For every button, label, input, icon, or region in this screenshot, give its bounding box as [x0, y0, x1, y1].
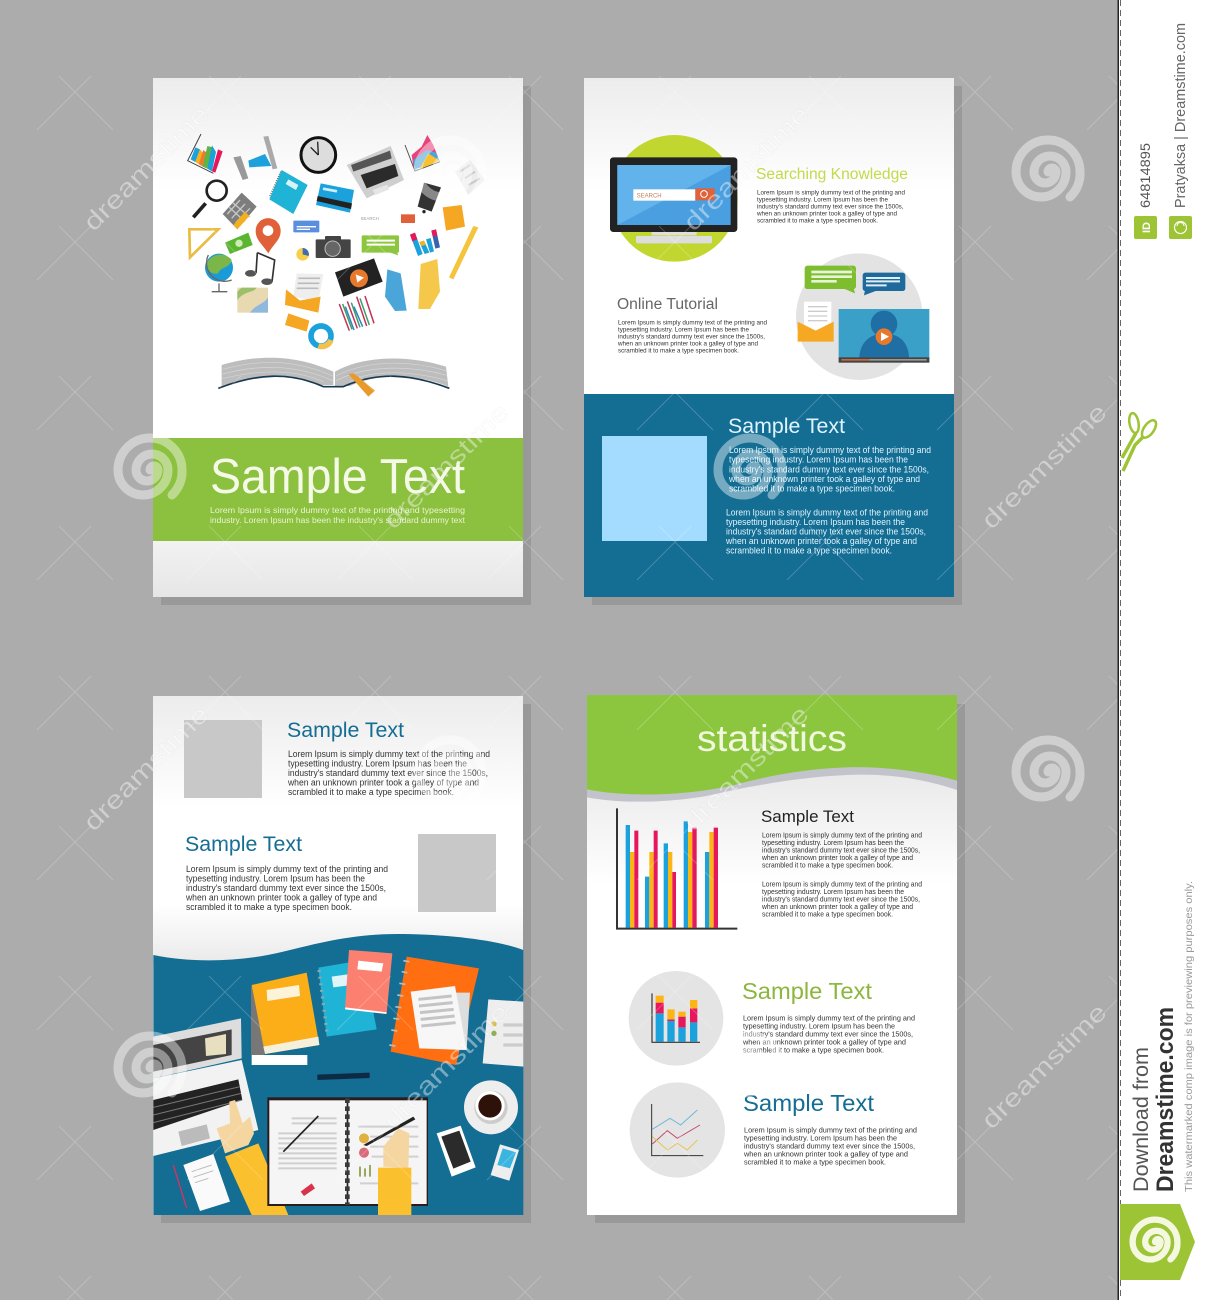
icon: left hand and sleeve: [217, 1100, 288, 1215]
text block: blue section first: [728, 445, 931, 493]
text block: top: Lorem Ipsum is simply dummy text of the printing and: [288, 749, 490, 759]
icon: bar chart: [188, 134, 223, 173]
text block: second: industry's standard dummy text ever since the 1500s,: [762, 896, 920, 904]
text block: top: when an unknown printer took a galley of type and: [287, 778, 479, 788]
icon: envelope with letter: [285, 273, 323, 313]
text block: second: typesetting industry. Lorem Ipsum has been the: [186, 874, 365, 884]
icon: credit card: [316, 183, 354, 213]
download label: Download from: [1130, 1047, 1153, 1192]
icon: online tutorial video and messages: [796, 253, 929, 380]
heading: sample text black: Sample Text: [761, 807, 854, 826]
text block: blue section second: [725, 508, 928, 556]
icon: id badge: [1134, 216, 1157, 239]
cover subtitle: industry. Lorem Ipsum has been the industry's standard dummy text: [210, 516, 466, 525]
icon: map pin: [256, 218, 281, 253]
icon: small envelope: [285, 313, 309, 332]
text block: blue section second: typesetting industry. Lorem Ipsum has been the: [726, 517, 905, 527]
text block: green section: [742, 1014, 915, 1054]
text block: blue section first: typesetting industry. Lorem Ipsum has been the: [729, 455, 908, 465]
icon cloud and open book: [188, 134, 485, 397]
icon: open planner: [267, 1097, 428, 1206]
icon: laptop: [153, 1018, 258, 1156]
icon: area chart: [405, 135, 440, 171]
icon: media player: [491, 1144, 519, 1181]
text block: green section: industry's standard dummy text ever since the 1500s,: [743, 1030, 913, 1038]
bar chart: [617, 808, 737, 929]
icon: coffee cup: [464, 1080, 518, 1134]
text block: top: industry's standard dummy text ever since the 1500s,: [288, 768, 488, 778]
preview note: This watermarked comp image is for previewing purposes only.: [1183, 881, 1195, 1192]
text block: searching knowledge: industry's standard dummy text ever since the 1500s,: [757, 204, 904, 210]
icon: notepad and pencil: [173, 1154, 230, 1211]
text block: blue heading section: Lorem Ipsum is simply dummy text of the printing and: [744, 1126, 917, 1134]
icon: orange book: [443, 205, 465, 231]
text block: first: typesetting industry. Lorem Ipsum has been the: [762, 840, 904, 847]
icon: globe: [205, 254, 233, 292]
icon: video player: [335, 258, 383, 297]
text block: searching knowledge: [756, 190, 905, 224]
icon: yellow book: [251, 973, 319, 1065]
text block: blue section first: Lorem Ipsum is simply dummy text of the printing and: [729, 445, 931, 455]
text block: online tutorial: [617, 320, 767, 354]
heading: online tutorial: Online Tutorial: [617, 296, 718, 313]
icon: music notes: [245, 253, 275, 285]
panel: desk flyer: [153, 696, 531, 1223]
icon: open book: [218, 358, 449, 397]
icon: smartphone: [437, 1126, 476, 1177]
cover subtitle: Lorem Ipsum is simply dummy text of the printing and typesetting: [210, 506, 465, 515]
heading: sample text green: Sample Text: [742, 978, 872, 1004]
text block: top: [287, 749, 490, 797]
dreamstime brand: Dreamstime.com: [1152, 1007, 1179, 1192]
image placeholder: [602, 436, 707, 541]
icon: clock: [301, 138, 336, 172]
text block: searching knowledge: when an unknown printer took a galley of type and: [756, 210, 897, 218]
cover subtitle: [210, 506, 466, 525]
icon: pie: [296, 248, 309, 261]
icon: donut chart: [311, 326, 331, 347]
icon: ruler: [449, 226, 478, 279]
text block: blue section second: scrambled it to make a type specimen book.: [726, 546, 892, 556]
author credit: Pratyaksa | Dreamstime.com: [1173, 23, 1189, 208]
icon: report page: [483, 999, 523, 1067]
stacked chart circle: [629, 971, 723, 1066]
icon: orange folder with papers: [389, 957, 479, 1065]
icon: scissors: [1122, 412, 1159, 471]
icon: yellow bag: [418, 259, 440, 309]
text block: green section: when an unknown printer took a galley of type and: [742, 1038, 906, 1046]
icon: calculator: [223, 193, 257, 229]
icon: set square: [189, 229, 218, 257]
text block: second: when an unknown printer took a galley of type and: [185, 892, 377, 902]
panel: searching knowledge flyer: [584, 78, 962, 605]
icon: money: [225, 233, 253, 254]
heading: sample text: Sample Text: [728, 415, 845, 438]
text block: blue section second: Lorem Ipsum is simply dummy text of the printing and: [726, 508, 928, 518]
text block: second: when an unknown printer took a galley of type and: [761, 904, 913, 911]
icon: teal notebook: [269, 170, 308, 214]
text block: online tutorial: industry's standard dummy text ever since the 1500s,: [618, 334, 765, 340]
icon: monitor with search: [610, 135, 738, 262]
watermark overlay: dreamstime: [678, 700, 815, 837]
desk illustration: [153, 934, 523, 1215]
text block: blue section first: industry's standard dummy text ever since the 1500s,: [729, 464, 929, 474]
icon: teal notebook: [318, 960, 377, 1037]
text block: blue heading section: when an unknown printer took a galley of type and: [743, 1150, 908, 1158]
icon: stacked bars: [410, 229, 440, 256]
watermark overlay: dreamstime: [976, 998, 1113, 1135]
text block: first: industry's standard dummy text ever since the 1500s,: [762, 848, 920, 854]
side strip: [1118, 0, 1208, 1300]
watermark overlay: dreamstime: [378, 398, 515, 535]
line chart circle: [630, 1082, 725, 1178]
text block: top: typesetting industry. Lorem Ipsum has been the: [288, 758, 467, 768]
heading: sample text second: Sample Text: [185, 833, 302, 856]
cover title: Sample Text: [210, 450, 465, 504]
text block: second: Lorem Ipsum is simply dummy text of the printing and: [186, 864, 388, 874]
text block: second: [761, 882, 922, 918]
text block: second: scrambled it to make a type specimen book.: [186, 902, 352, 912]
text block: blue section first: when an unknown printer took a galley of type and: [728, 474, 920, 484]
text block: green section: scrambled it to make a type specimen book.: [743, 1046, 884, 1054]
text block: first: scrambled it to make a type specimen book.: [762, 862, 893, 870]
panel: cover flyer: [153, 78, 531, 605]
image placeholder top: [184, 720, 262, 798]
icon: blue bag: [385, 269, 407, 311]
icon: blue speech bubble: [293, 221, 319, 232]
panel: statistics flyer: [587, 695, 965, 1223]
icon: magnifier: [193, 181, 227, 217]
text block: blue heading section: scrambled it to make a type specimen book.: [744, 1158, 886, 1166]
icon: newspaper: [455, 160, 485, 195]
icon: green speech bubble: [362, 235, 399, 255]
icon: pen: [317, 1073, 370, 1080]
icon: green logo banner: [1120, 1204, 1195, 1280]
heading: statistics: statistics: [697, 718, 847, 759]
watermark overlay: dreamstime: [678, 100, 815, 237]
green title band: [153, 438, 523, 541]
text block: green section: typesetting industry. Lorem Ipsum has been the: [743, 1022, 895, 1030]
text block: online tutorial: Lorem Ipsum is simply dummy text of the printing and: [618, 320, 767, 326]
heading: sample text top: Sample Text: [287, 719, 404, 742]
text block: blue section second: when an unknown printer took a galley of type and: [725, 536, 917, 546]
icon: right hand and sleeve with pen: [363, 1117, 415, 1215]
text block: online tutorial: scrambled it to make a type specimen book.: [618, 348, 739, 354]
icon: phone: [418, 183, 441, 213]
text block: blue heading section: industry's standard dummy text ever since the 1500s,: [744, 1142, 915, 1150]
text block: searching knowledge: typesetting industry. Lorem Ipsum has been the: [757, 196, 888, 204]
watermark overlay: dreamstime: [78, 700, 215, 837]
text block: blue section first: scrambled it to make a type specimen book.: [729, 483, 895, 493]
text block: second: scrambled it to make a type specimen book.: [762, 912, 893, 918]
icon: megaphone: [233, 136, 277, 180]
text block: searching knowledge: Lorem Ipsum is simply dummy text of the printing and: [757, 190, 905, 196]
search label: [361, 214, 415, 223]
icon: map: [237, 288, 268, 313]
text block: first: [761, 832, 922, 870]
text block: blue heading section: typesetting industry. Lorem Ipsum has been the: [744, 1134, 897, 1142]
charts: [617, 808, 737, 1178]
text block: online tutorial: typesetting industry. Lorem Ipsum has been the: [618, 326, 749, 334]
text block: second: industry's standard dummy text ever since the 1500s,: [186, 883, 386, 893]
text block: top: scrambled it to make a type specimen book.: [288, 787, 454, 797]
icon: laptop: [347, 146, 404, 198]
image id: 64814895: [1137, 143, 1153, 208]
text block: second: Lorem Ipsum is simply dummy text of the printing and: [762, 882, 922, 888]
icon: thin bars chart: [339, 296, 374, 331]
watermark overlay: dreamstime: [378, 998, 515, 1135]
green header wave: [587, 695, 957, 802]
icon: monitor with search: SEARCH: [637, 193, 662, 199]
text block: first: when an unknown printer took a galley of type and: [761, 855, 913, 862]
text block: blue heading section: [743, 1126, 917, 1166]
text block: second: typesetting industry. Lorem Ipsum has been the: [762, 889, 904, 896]
watermark overlay: dreamstime: [976, 398, 1113, 535]
watermark overlay: dreamstime: [78, 100, 215, 237]
search label: SEARCH: [361, 216, 379, 221]
icon: copyright badge: [1169, 216, 1192, 239]
image placeholder second: [418, 834, 496, 912]
heading: sample text blue: Sample Text: [743, 1090, 874, 1116]
blue section: [584, 394, 954, 597]
text block: green section: Lorem Ipsum is simply dummy text of the printing and: [743, 1014, 915, 1022]
icon: pink notebook: [345, 950, 392, 1014]
heading: searching knowledge: Searching Knowledge: [756, 166, 908, 183]
text block: blue section second: industry's standard dummy text ever since the 1500s,: [726, 527, 926, 537]
text block: searching knowledge: scrambled it to make a type specimen book.: [757, 218, 878, 224]
text block: second: [185, 864, 388, 912]
icon: id badge: ID: [1141, 222, 1153, 233]
text block: first: Lorem Ipsum is simply dummy text of the printing and: [762, 832, 922, 840]
icon: camera: [316, 236, 351, 258]
text block: online tutorial: when an unknown printer took a galley of type and: [617, 340, 758, 348]
